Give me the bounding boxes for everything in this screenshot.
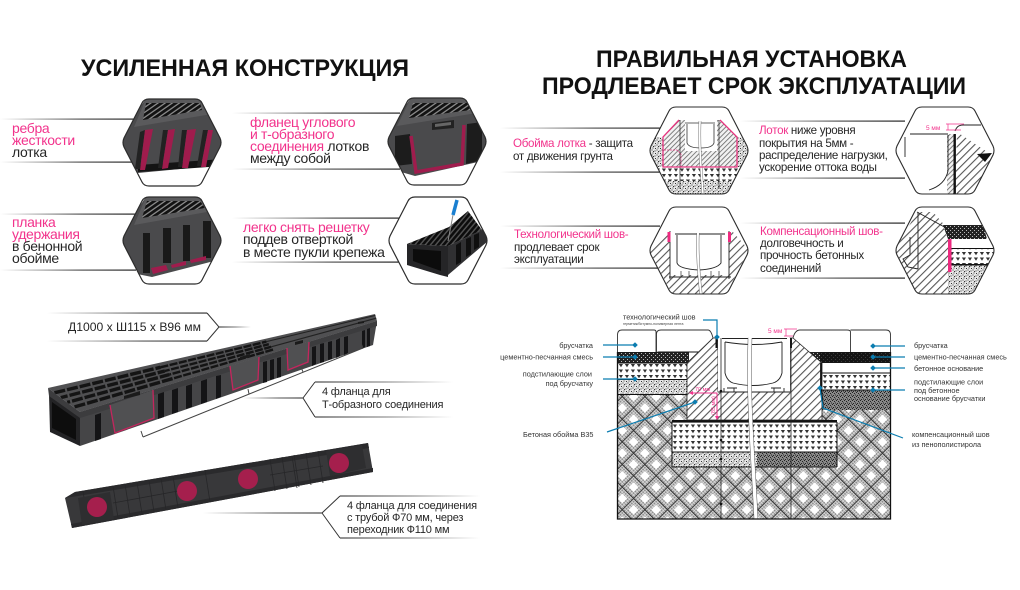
labels: right of section: под бетонное	[914, 386, 960, 395]
leader lines	[603, 320, 905, 438]
text: retention bar: планка	[12, 214, 56, 230]
illustration: assembled channel with grate	[48, 314, 377, 446]
text: compensation seam: прочность бетонных	[760, 249, 864, 262]
icon: retention bar hexagon	[122, 197, 222, 284]
text: casing	[513, 137, 634, 163]
callout: pipe connection flanges: с трубой Ф70 мм, через	[347, 512, 463, 524]
text: retention bar: удержания	[12, 226, 80, 242]
layers: left	[617, 352, 700, 394]
text: compensation seam	[760, 225, 883, 275]
label: technological seam: технологический шов	[623, 312, 696, 322]
text: technological seam	[514, 228, 629, 266]
panel: channel dimensions callout	[47, 312, 251, 342]
panel: channel below surface	[740, 107, 995, 194]
label: technological seam	[623, 312, 696, 326]
side ribs	[95, 328, 370, 441]
pipe flange circles	[87, 453, 349, 517]
text: grate removal	[243, 219, 385, 260]
centre line and verticals	[720, 338, 791, 519]
base layers	[672, 420, 837, 467]
callout: T-joint flanges with bracket: Т-образного соединения	[322, 399, 443, 411]
panel: easy grate removal	[232, 197, 488, 284]
icon: screwdriver	[448, 200, 457, 241]
end face	[49, 394, 80, 446]
labels: left of section: цементно-песчанная смесь	[500, 352, 593, 362]
labels: right of section	[912, 341, 1007, 449]
labels: left of section: под брусчатку	[546, 379, 593, 388]
text: retention bar: в бенонной	[12, 238, 82, 254]
icon: flange hexagon	[387, 98, 487, 185]
callout: pipe connection flanges	[203, 496, 480, 538]
text: below surface: распределение нагрузки,	[759, 149, 888, 162]
labels: right of section: бетонное основание	[914, 364, 983, 373]
ground	[617, 394, 891, 519]
labels: left of section: брусчатка	[559, 341, 594, 350]
text: ribs: лотка	[12, 144, 47, 160]
text: flange: фланец углового	[250, 114, 356, 130]
paving bricks	[618, 330, 890, 352]
labels: right of section: основание брусчатки	[914, 394, 985, 403]
lip	[48, 321, 377, 418]
text: below surface: ускорение оттока воды	[759, 161, 877, 174]
icon: 5 mm detail hexagon	[896, 107, 995, 194]
flanges	[110, 342, 309, 433]
title: correct installation: ПРАВИЛЬНАЯ УСТАНОВКА	[596, 46, 907, 73]
text: retention bar	[12, 214, 82, 266]
labels: left of section: Бетоная обойма B35	[523, 430, 593, 439]
text: technological seam: продлевает срок	[514, 241, 600, 254]
text: below surface: покрытия на 5мм -	[759, 137, 854, 150]
panel: channel dimensions callout: Д1000 х Ш115 х В96 мм	[68, 322, 201, 334]
text: compensation seam: долговечность и	[760, 237, 843, 250]
labels: right of section: брусчатка	[914, 341, 949, 350]
panel: flange	[232, 98, 487, 185]
text: flange: соединения лотков	[250, 138, 369, 154]
title: correct installation	[542, 46, 966, 100]
text: ribs	[12, 120, 75, 160]
text: grate removal: в месте пукли крепежа	[243, 244, 385, 260]
text: compensation seam: соединений	[760, 262, 821, 275]
text: flange: и т-образного	[250, 126, 335, 142]
labels: right of section: компенсационный шов	[912, 430, 990, 439]
icon: seam hexagon	[649, 207, 749, 294]
callout: T-joint flanges with bracket	[141, 343, 453, 437]
text: casing: Обойма лотка - защита	[513, 137, 634, 150]
label: technological seam: герметик/битумно-полимерная лента	[623, 322, 683, 326]
panel: compensation seam	[740, 207, 995, 294]
text: compensation seam: Компенсационный шов-	[760, 225, 883, 238]
chart: installation cross-section	[603, 320, 905, 519]
icon: compensation seam hexagon	[895, 207, 995, 294]
labels: right of section: подстилающие слои	[914, 378, 983, 386]
side body	[80, 321, 377, 446]
grate latches	[124, 321, 364, 399]
frame	[618, 352, 890, 519]
text: retention bar: обойме	[12, 250, 59, 266]
concrete casing	[687, 338, 822, 420]
pink dimensions	[689, 328, 797, 420]
text: below surface: Лоток ниже уровня	[759, 124, 855, 137]
callout: pipe connection flanges: 4 фланца для соединения	[347, 500, 477, 512]
layers: right	[810, 352, 891, 410]
icon: ribs hexagon	[122, 99, 222, 186]
text: grate removal: поддев отверткой	[243, 231, 353, 247]
labels: left of section	[500, 341, 594, 439]
grate top	[48, 314, 377, 412]
labels: right of section: из пенополистирола	[912, 440, 982, 449]
grate slots	[54, 315, 376, 407]
text: grate removal: легко снять решетку	[243, 219, 370, 235]
panel: retention bar	[0, 197, 222, 284]
icon: 5 mm detail hexagon: 5 мм	[926, 125, 941, 132]
text: flange: между собой	[250, 150, 331, 166]
channel bowl	[716, 338, 792, 392]
title: correct installation: ПРОДЛЕВАЕТ СРОК ЭКСПЛУАТАЦИИ	[542, 73, 966, 100]
pink dimensions: 5 мм	[768, 328, 783, 335]
callout: T-joint flanges with bracket: 4 фланца для	[322, 386, 391, 398]
leader markers	[632, 334, 876, 405]
text: technological seam: Технологический шов-	[514, 228, 629, 241]
labels: left of section: подстилающие слои	[523, 370, 592, 378]
panel: technological seam	[500, 207, 749, 294]
labels: right of section: цементно-песчанная смесь	[914, 352, 1007, 362]
pink dimensions: 70 мм	[695, 387, 710, 393]
text: below surface	[759, 124, 888, 174]
compensation seam line	[821, 363, 823, 408]
icon: screwdriver hexagon	[389, 197, 488, 284]
text: flange	[250, 114, 369, 166]
illustration: channel underside with pipe flanges	[65, 443, 373, 528]
text: technological seam: эксплуатации	[514, 253, 583, 266]
title: reinforced construction: УСИЛЕННАЯ КОНСТРУКЦИЯ	[81, 55, 409, 82]
text: ribs: жесткости	[12, 132, 75, 148]
pink dimensions: (85 мм)	[711, 396, 717, 415]
panel: stiffening ribs	[0, 99, 222, 186]
text: casing: от движения грунта	[513, 150, 614, 163]
text: ribs: ребра	[12, 120, 50, 136]
callout: pipe connection flanges: переходник Ф110 мм	[347, 524, 449, 536]
icon: casing section hexagon	[649, 107, 749, 194]
panel: channel casing	[500, 107, 749, 194]
